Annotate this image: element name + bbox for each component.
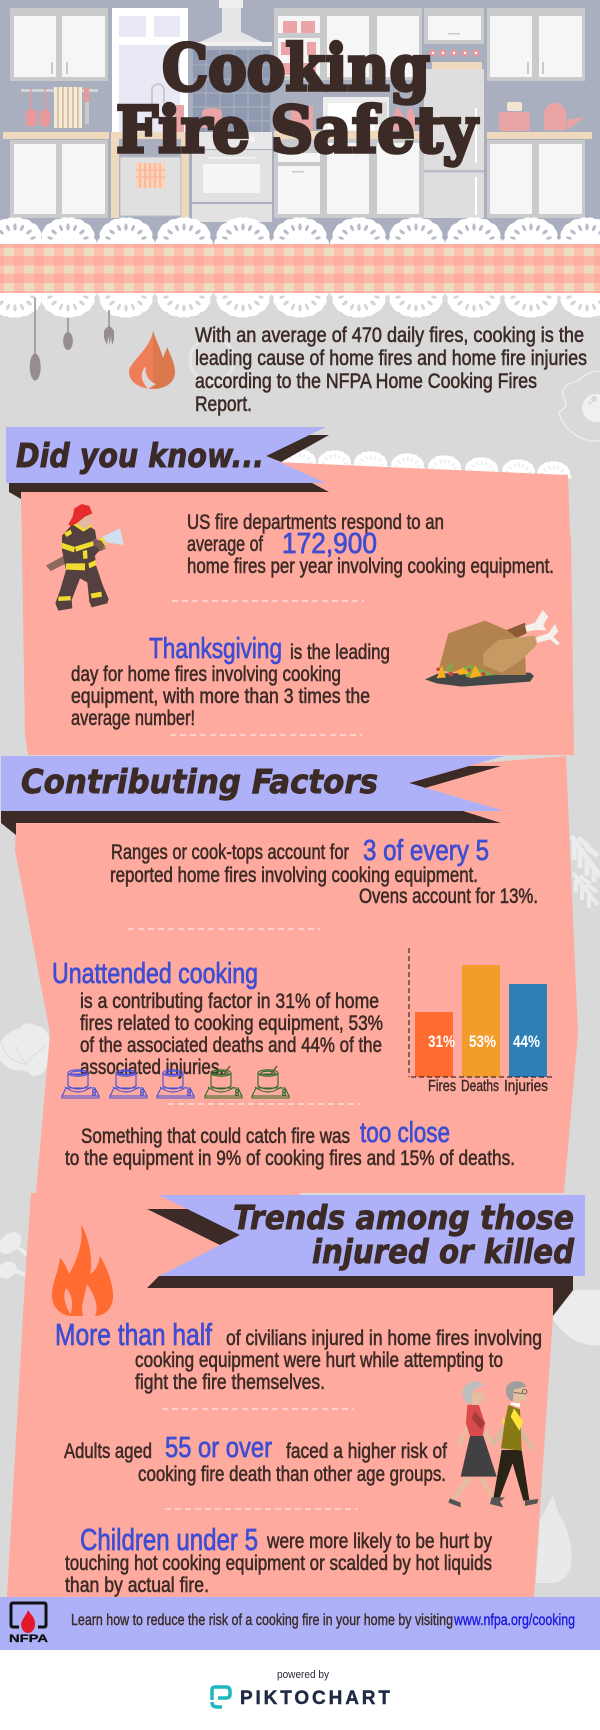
text: fire departments stat: [187, 511, 554, 578]
icon: turkey: [425, 610, 560, 687]
panel: trends: [7, 1193, 585, 1597]
text: unattended cooking: associated injuries.: [80, 1056, 224, 1079]
text: more than half: More than half: [55, 1317, 212, 1352]
icon: NFPA logo: [9, 1603, 48, 1645]
intro text: [195, 324, 587, 416]
lace trim above tablecloth: [0, 217, 600, 244]
panel: footer call to action: [0, 1597, 600, 1650]
text: adults aged 55 or over: cooking fire death than other age groups.: [138, 1463, 446, 1486]
banner: contributing factors: [1, 756, 504, 835]
bar chart: 44%: [513, 1032, 540, 1051]
text: ranges stat: 3 of every 5: [363, 835, 489, 867]
text: ranges stat: Ranges or cook-tops account for: [111, 841, 349, 864]
icon: NFPA logo: NFPA: [9, 1633, 48, 1645]
text: unattended cooking: of the associated deaths and 44% of the: [80, 1034, 382, 1057]
text: unattended cooking: is a contributing factor in 31% of home: [80, 990, 379, 1013]
lower left cabinet: [10, 140, 108, 218]
text: fire departments stat: US fire departments respond to an: [187, 511, 444, 534]
text: unattended cooking: [52, 958, 383, 1079]
banner: contributing factors: Contributing Factors: [21, 762, 378, 801]
lace behind Did you know panel: [281, 449, 572, 478]
text: more than half: of civilians injured in home fires involving: [226, 1327, 542, 1350]
fridge: [424, 69, 484, 218]
text: unattended cooking: Unattended cooking: [52, 958, 258, 990]
microwave: [323, 97, 389, 132]
bar chart: Deaths: [461, 1078, 499, 1095]
window: [112, 8, 188, 133]
backsplash: [193, 50, 270, 132]
text: learn more link: Learn how to reduce the risk of a cooking fire in your home by visiting: [71, 1612, 453, 1629]
title: Cooking: [162, 31, 430, 106]
panel: contributing factors: [1, 756, 578, 1193]
icon: elderly couple walking: [448, 1381, 538, 1507]
bar chart: 31%: [428, 1032, 455, 1051]
text: children under 5: than by actual fire.: [65, 1574, 209, 1597]
upper middle cabinets: [274, 8, 422, 80]
banner: trends: injured or killed: [312, 1232, 574, 1271]
text: adults aged 55 or over: 55 or over: [165, 1432, 272, 1464]
intro text: Report.: [195, 393, 252, 416]
flower rack: [430, 50, 482, 69]
kitchen illustration header: [0, 0, 600, 244]
bar chart: Fires: [428, 1078, 456, 1095]
upper left cabinet: [10, 8, 108, 81]
bar chart: Injuries: [504, 1078, 548, 1095]
text: thanksgiving: [71, 633, 390, 730]
icon: piktochart mark: [212, 1687, 230, 1707]
bar chart: 53%: [469, 1032, 496, 1051]
lace trim below tablecloth: [0, 291, 600, 318]
text: children under 5: touching hot cooking equipment or scalded by hot liquids: [65, 1552, 492, 1575]
title: Fire Safety: [116, 93, 479, 168]
hanging utensils: [30, 298, 114, 380]
banner: did you know: [6, 427, 329, 499]
text: fire departments stat: 172,900: [282, 528, 377, 560]
text: ranges stat: reported home fires involving cooking equipment.: [110, 864, 478, 887]
hanging rail with utensils: [21, 87, 98, 128]
text: ranges stat: Ovens account for 13%.: [359, 885, 538, 908]
text: adults aged 55 or over: [64, 1432, 447, 1486]
icons: five stove pots: [62, 1066, 289, 1098]
text: more than half: cooking equipment were hurt while attempting to: [135, 1349, 503, 1372]
gingham tablecloth band: [0, 244, 600, 293]
text: too close: to the equipment in 9% of cooking fires and 15% of deaths.: [65, 1147, 515, 1170]
text: thanksgiving: Thanksgiving: [149, 633, 282, 665]
text: adults aged 55 or over: Adults aged: [64, 1440, 152, 1463]
text: more than half: [55, 1317, 542, 1394]
upper cabinet over fridge: [424, 8, 484, 44]
text: children under 5: [65, 1522, 492, 1597]
icon: firefighter: [46, 504, 124, 611]
range hood: [197, 0, 272, 46]
title: [116, 31, 479, 168]
powered by piktochart logo: [212, 1669, 390, 1709]
icon: intro flame: [129, 331, 175, 389]
upper right cabinet: [487, 8, 585, 81]
stove: [191, 132, 272, 222]
lower right cabinet: [487, 140, 585, 218]
panel: did you know: [6, 427, 574, 755]
pink kitchen accessories: [175, 102, 584, 132]
icon: large flame: [52, 1224, 113, 1316]
dishwasher: [120, 157, 181, 216]
text: too close: too close: [360, 1117, 450, 1149]
text: adults aged 55 or over: faced a higher risk of: [286, 1440, 447, 1463]
text: ranges stat: [110, 835, 538, 908]
powered by piktochart logo: PIKTOCHART: [240, 1688, 390, 1709]
lower middle cabinets: [274, 139, 424, 218]
intro text: according to the NFPA Home Cooking Fires: [195, 370, 537, 393]
text: children under 5: Children under 5: [80, 1522, 258, 1557]
text: thanksgiving: is the leading: [290, 641, 390, 664]
text: thanksgiving: average number!: [71, 707, 195, 730]
text: fire departments stat: average of: [187, 533, 263, 556]
text: too close: [65, 1117, 515, 1170]
text: too close: Something that could catch fire was: [81, 1125, 350, 1148]
banner: trends: Trends among those: [233, 1198, 574, 1237]
banner: trends: [147, 1195, 585, 1316]
bar chart: [409, 948, 553, 1095]
powered by piktochart logo: powered by: [277, 1669, 329, 1681]
text: children under 5: were more likely to be hurt by: [266, 1530, 492, 1553]
text: unattended cooking: fires related to cooking equipment, 53%: [80, 1012, 383, 1035]
background food silhouettes: [0, 338, 600, 1583]
banner: did you know: Did you know...: [16, 436, 264, 475]
counters: [3, 131, 592, 218]
text: more than half: fight the fire themselves.: [135, 1371, 325, 1394]
text: thanksgiving: equipment, with more than 3 times the: [71, 685, 370, 708]
text: thanksgiving: day for home fires involving cooking: [71, 663, 341, 686]
